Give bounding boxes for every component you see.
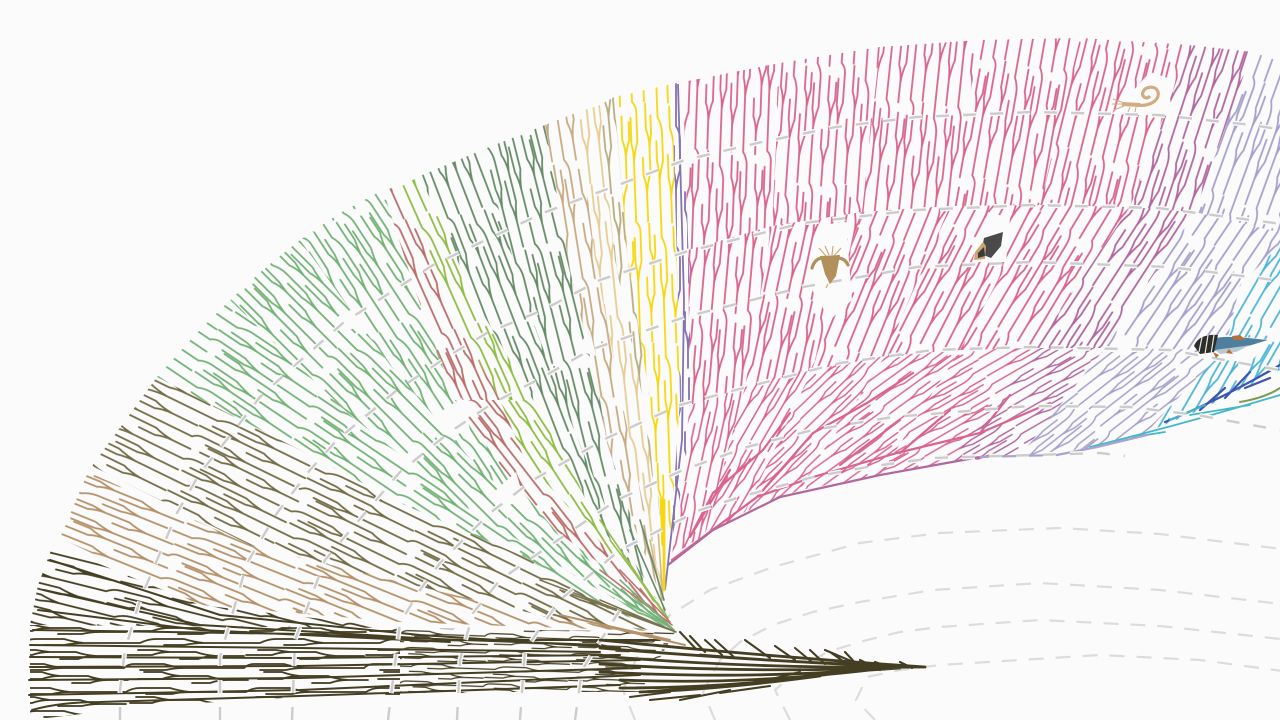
icon: trilobite (974, 232, 1003, 260)
clade: lime group (402, 176, 672, 628)
clade: grey tan stripe (600, 97, 664, 600)
clade: purple stripe (665, 82, 690, 590)
clade: yellow group (614, 84, 680, 600)
clade: royal blue, teal and olive branches (1090, 365, 1280, 447)
icon: shrimp-like fossil (1112, 87, 1158, 112)
clade: green group (157, 190, 672, 628)
clade: mauve group (950, 45, 1252, 462)
dashed time rings in the open centre (623, 528, 1280, 720)
clade: cyan group (1147, 235, 1280, 432)
clade: pale tan stripe (578, 105, 664, 600)
main stems of the pink and mauve groups (668, 373, 1147, 565)
clade tip: dark brown branch extending right (600, 632, 925, 700)
clade: olive group (92, 377, 677, 633)
clade: red group (383, 186, 672, 628)
clade: lilac group (1020, 52, 1280, 456)
open gaps among the branches (332, 72, 1272, 506)
clade: dark green group (420, 125, 668, 618)
clade: pink arthropod group (672, 38, 1190, 555)
dashed time rings over the tree (120, 112, 1280, 720)
clade: tan stripe (545, 112, 664, 605)
icon: armoured fish (1194, 335, 1268, 358)
base fan where the clades converge (540, 500, 685, 645)
icon: crustacean larva (812, 246, 848, 288)
clade: tan group (60, 472, 675, 632)
clade: dark brown base group (29, 545, 675, 720)
